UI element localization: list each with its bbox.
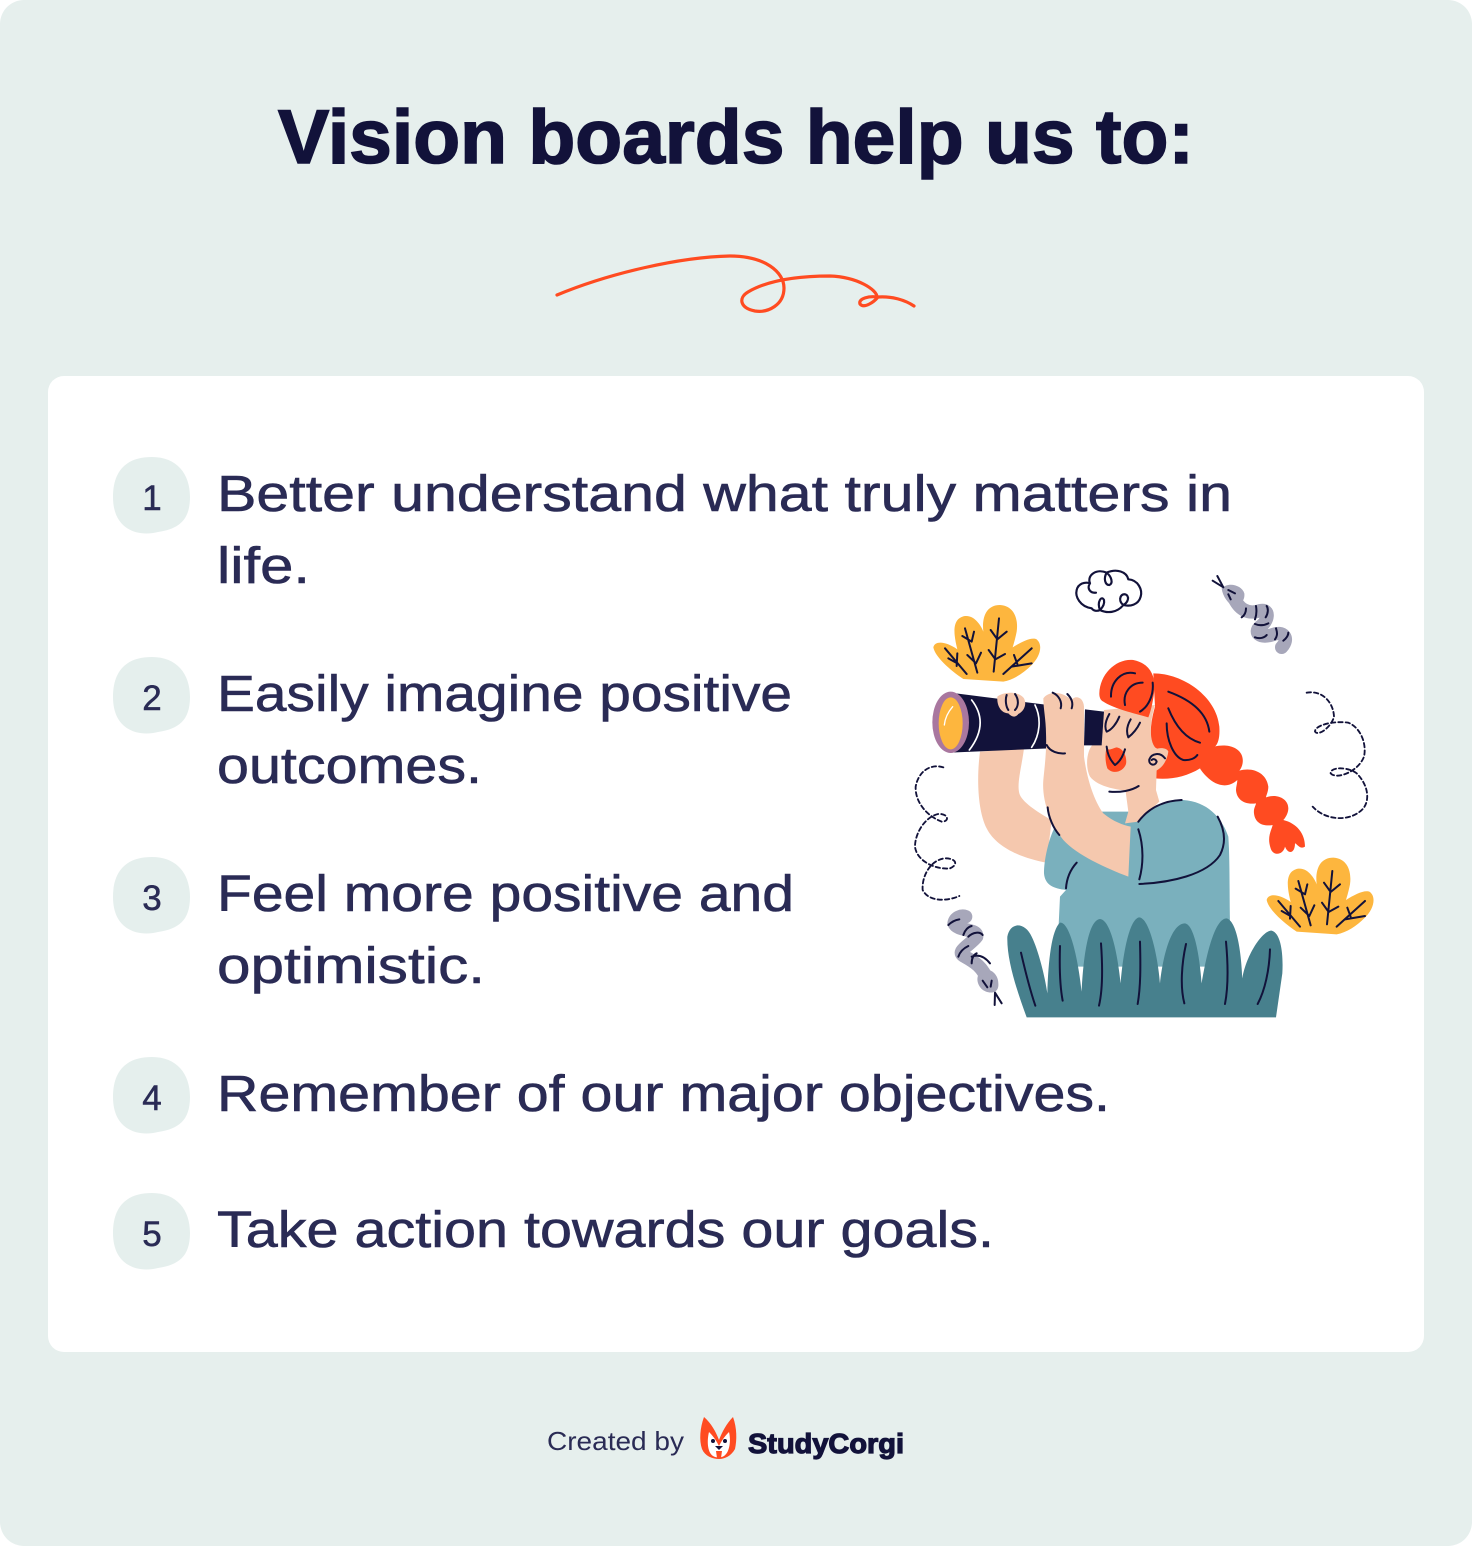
telescope [932, 692, 1104, 753]
footer: created by: Created by [547, 1426, 684, 1456]
ear [1147, 748, 1168, 772]
icon: shrub top [933, 605, 1040, 682]
back arm [978, 748, 1052, 863]
face details [1047, 693, 1165, 792]
list item 2: Easily imagine positive [217, 665, 792, 722]
illustration: woman with telescope [915, 571, 1374, 1017]
logo: corgi icon [700, 1417, 736, 1459]
shirt [1044, 800, 1233, 967]
icon: dashed curl left [915, 766, 959, 900]
list item 1: life. [217, 537, 310, 594]
icon: snake top [1213, 576, 1288, 647]
hair strands [1111, 673, 1209, 760]
front arm [1043, 693, 1131, 877]
list item 4 [113, 1057, 1110, 1133]
white content panel [48, 376, 1424, 1352]
decorative squiggle [557, 256, 914, 311]
list item 2 [113, 657, 792, 794]
list item 4: 4 [142, 1079, 162, 1118]
logo: StudyCorgi wordmark: StudyCorgi [748, 1428, 904, 1459]
list item 5: 5 [142, 1215, 162, 1254]
list item 1 [113, 457, 1232, 594]
list item 2: outcomes. [217, 737, 482, 794]
list item 4: Remember of our major objectives. [217, 1065, 1110, 1122]
icon: shrub bottom [1267, 858, 1374, 934]
shirt details [1048, 800, 1224, 888]
list item 3: Feel more positive and [217, 865, 794, 922]
list item 5 [113, 1193, 994, 1269]
list item 5: Take action towards our goals. [217, 1201, 994, 1258]
list item 3: 3 [142, 879, 162, 918]
icon: cloud [1076, 571, 1141, 612]
icon: snake bottom [948, 916, 1002, 1005]
hand on telescope [997, 693, 1025, 717]
list item 1: Better understand what truly matters in [217, 465, 1232, 522]
icon: dashed curl right [1307, 692, 1367, 818]
title: Vision boards help us to: [278, 95, 1194, 180]
list item 1: 1 [142, 479, 162, 518]
hair bun [1099, 660, 1155, 717]
hair [1151, 673, 1219, 779]
list item 3: optimistic. [217, 937, 485, 994]
list item 3 [113, 857, 794, 994]
grass [1007, 917, 1283, 1017]
neck [1125, 787, 1159, 823]
face [1087, 705, 1157, 791]
braid [1200, 745, 1305, 854]
list item 2: 2 [142, 679, 162, 718]
